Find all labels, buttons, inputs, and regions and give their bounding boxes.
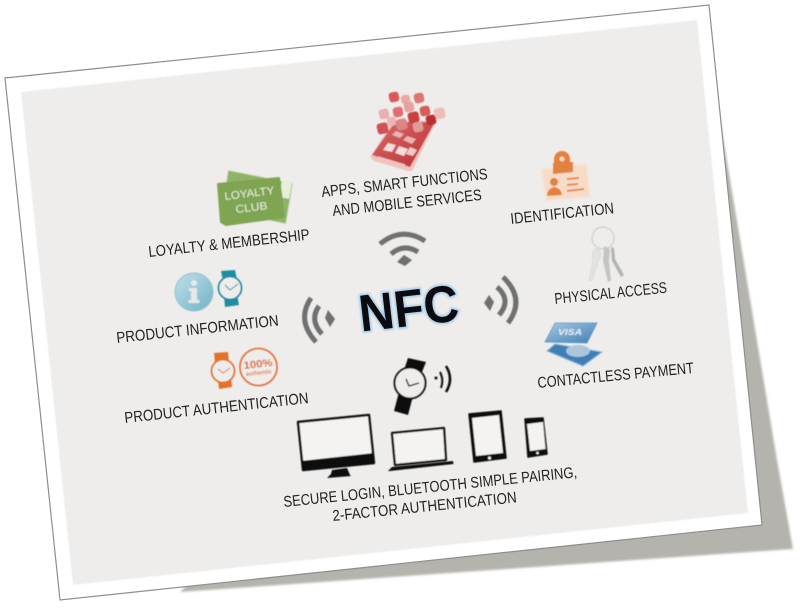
label: secure login: 2-FACTOR AUTHENTICATION [332,489,517,525]
panel: contactless payment [537,323,695,392]
label: apps [321,166,488,220]
panel: secure login and pairing [283,358,578,525]
label: physical access: PHYSICAL ACCESS [554,280,668,308]
icon: 100% authentic badge: 100% [243,357,274,372]
icon: info circle [175,273,213,311]
icon: wireless waves right [484,277,516,323]
label: product information: PRODUCT INFORMATION [116,312,279,347]
tilted card shadow [180,90,793,592]
icon: tablet [469,411,506,462]
title: NFC: NFC [356,275,462,344]
icon: loyalty cards: LOYALTY [224,185,276,203]
icon: smartphone [525,418,547,457]
icon: teal watch [218,270,242,307]
panel: loyalty and membership [148,170,310,261]
icon: 100% authentic badge: authentic [246,369,273,378]
icon: loyalty cards: CLUB [235,200,268,216]
panel: product information [116,270,279,347]
label: apps: AND MOBILE SERVICES [332,187,483,220]
icon: visa cards: VISA [558,328,582,337]
icon: smartwatch with waves [394,358,450,415]
icon: loyalty cards [218,170,293,225]
icon: laptop [388,428,454,471]
label: apps: APPS, SMART FUNCTIONS [321,166,488,201]
title: NFC: NFC [356,275,462,344]
panel: apps and mobile services [321,91,488,220]
icon: orange watch [212,352,234,389]
label: loyalty: LOYALTY & MEMBERSHIP [148,227,310,261]
label: product authentication: PRODUCT AUTHENTICATION [124,390,309,427]
icon: id badge [541,151,590,201]
icon: desktop monitor [298,415,374,478]
label: identification: IDENTIFICATION [510,200,615,228]
icon: keys [589,227,624,282]
panel: physical access [554,227,668,308]
icon: wireless waves top [380,234,425,266]
panel: identification [510,151,615,228]
panel: product authentication [124,348,309,427]
icon: smartphone with floating apps [370,91,446,171]
icon: wireless waves left [305,298,335,342]
label: contactless payment: CONTACTLESS PAYMENT [537,360,695,392]
label: secure login: SECURE LOGIN, BLUETOOTH SIMPLE PAIRING, [283,464,578,511]
label: secure login [283,464,578,525]
icon: visa cards [545,323,602,366]
icon: 100% authentic badge [240,348,277,386]
